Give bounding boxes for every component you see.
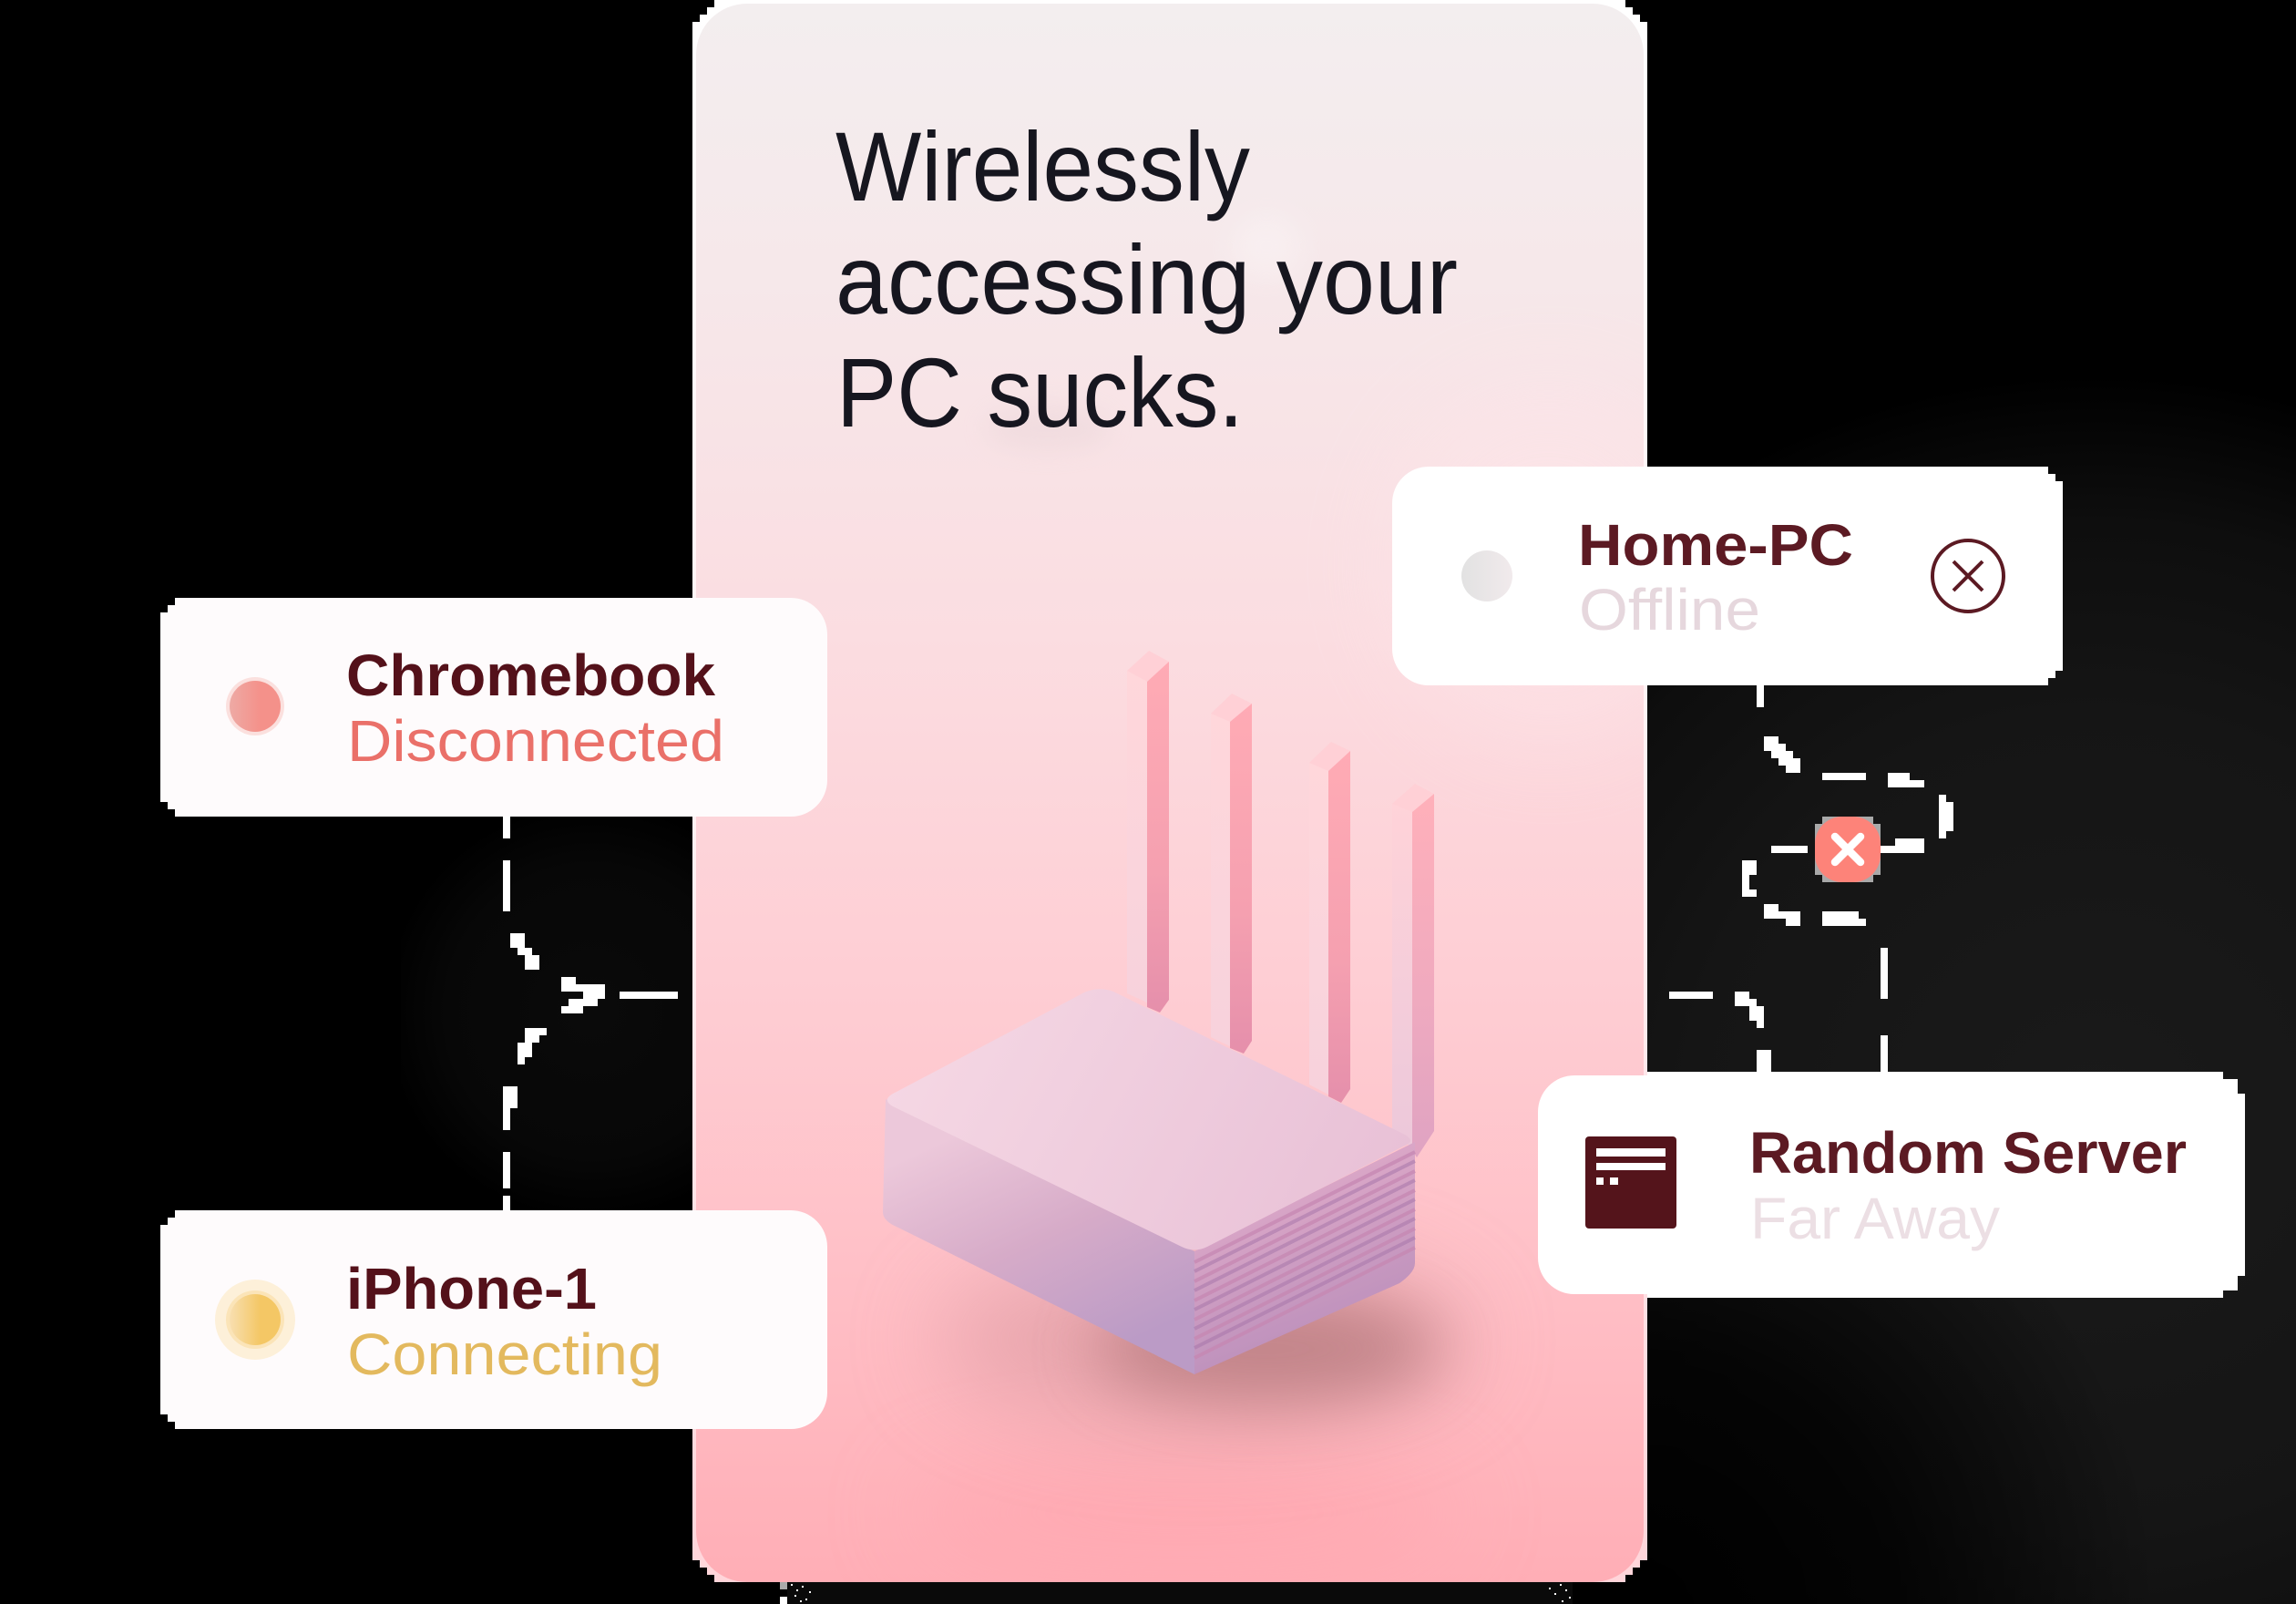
panel: main card [692,0,1713,1582]
status: Disconnected: Disconnected [347,708,724,774]
dashed connector: Home-PC loop to router and server [1669,685,1953,1072]
antenna 4 [1392,784,1434,1157]
dashed connector: left devices to router [503,817,678,1210]
antenna 1 [1127,651,1169,1013]
router body: vent stripes [1194,1152,1415,1358]
router body: right face [1194,1142,1415,1374]
card: Home-PC [1392,467,2063,685]
antenna 2 [1211,694,1252,1054]
icon: red cross on connector [1815,817,1881,882]
label: Home-PC: Home-PC [1578,512,1853,578]
status dot: disconnected [226,677,284,735]
title: PC sucks. [836,337,1244,447]
router illustration [883,651,1467,1426]
card: Chromebook [160,598,827,817]
label: Chromebook: Chromebook [346,643,715,708]
card: iPhone-1 [160,1210,827,1429]
title [835,111,1458,447]
label: Random Server: Random Server [1749,1120,2187,1186]
title: accessing your [835,224,1458,334]
title: Wirelessly [835,111,1250,221]
bottom edge noise [780,1582,1571,1604]
router body: left face [883,1099,1194,1374]
icon: close circle [1932,540,2004,612]
dark background glow [401,346,2296,1604]
antenna 3 [1309,742,1350,1103]
status: Connecting: Connecting [347,1321,662,1387]
icon: server window [1585,1136,1676,1229]
card: Random Server [1538,1072,2245,1298]
router shadow [938,1253,1467,1426]
label: iPhone-1: iPhone-1 [346,1256,597,1321]
status dot: offline [1461,550,1512,602]
status: Far Away: Far Away [1750,1186,2000,1251]
status dot: connecting [215,1280,295,1360]
router body: top face [887,989,1410,1250]
status: Offline: Offline [1579,577,1760,643]
